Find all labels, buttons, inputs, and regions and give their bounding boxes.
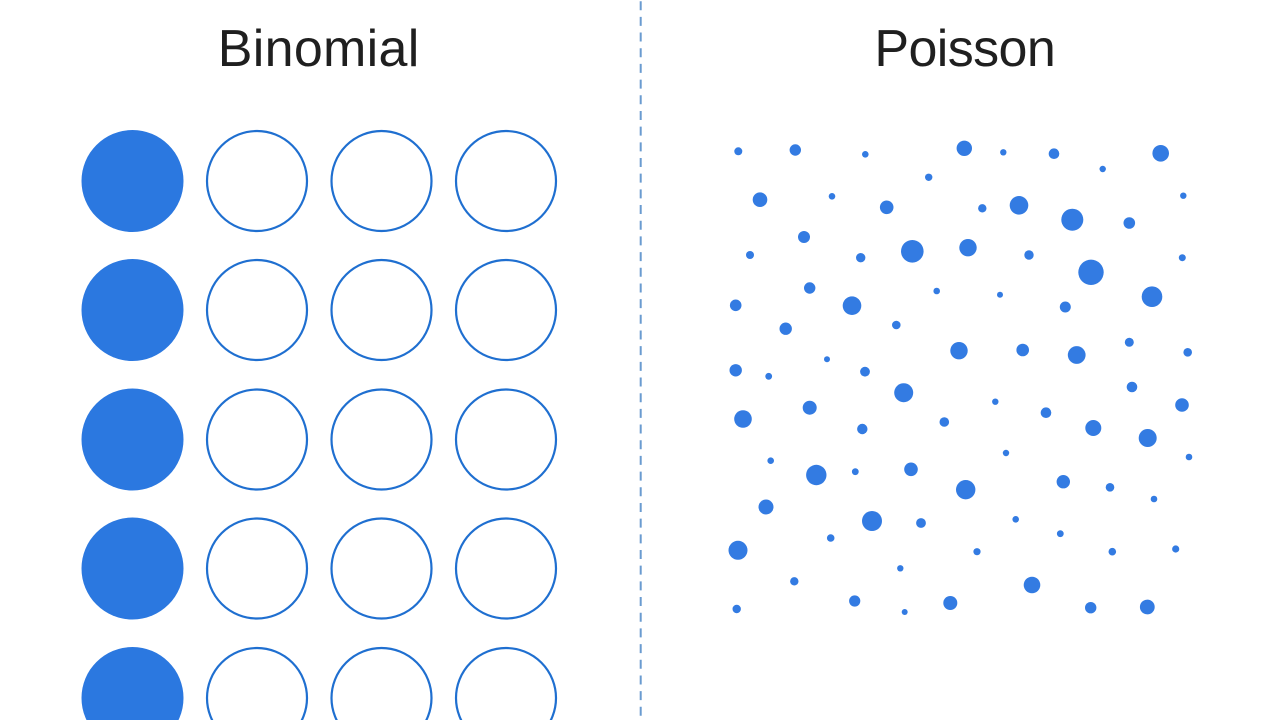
- title: Poisson: Poisson: [874, 20, 1055, 78]
- binomial grid: [82, 130, 556, 720]
- poisson scatter: [728, 141, 1192, 615]
- title: Binomial: Binomial: [218, 20, 420, 78]
